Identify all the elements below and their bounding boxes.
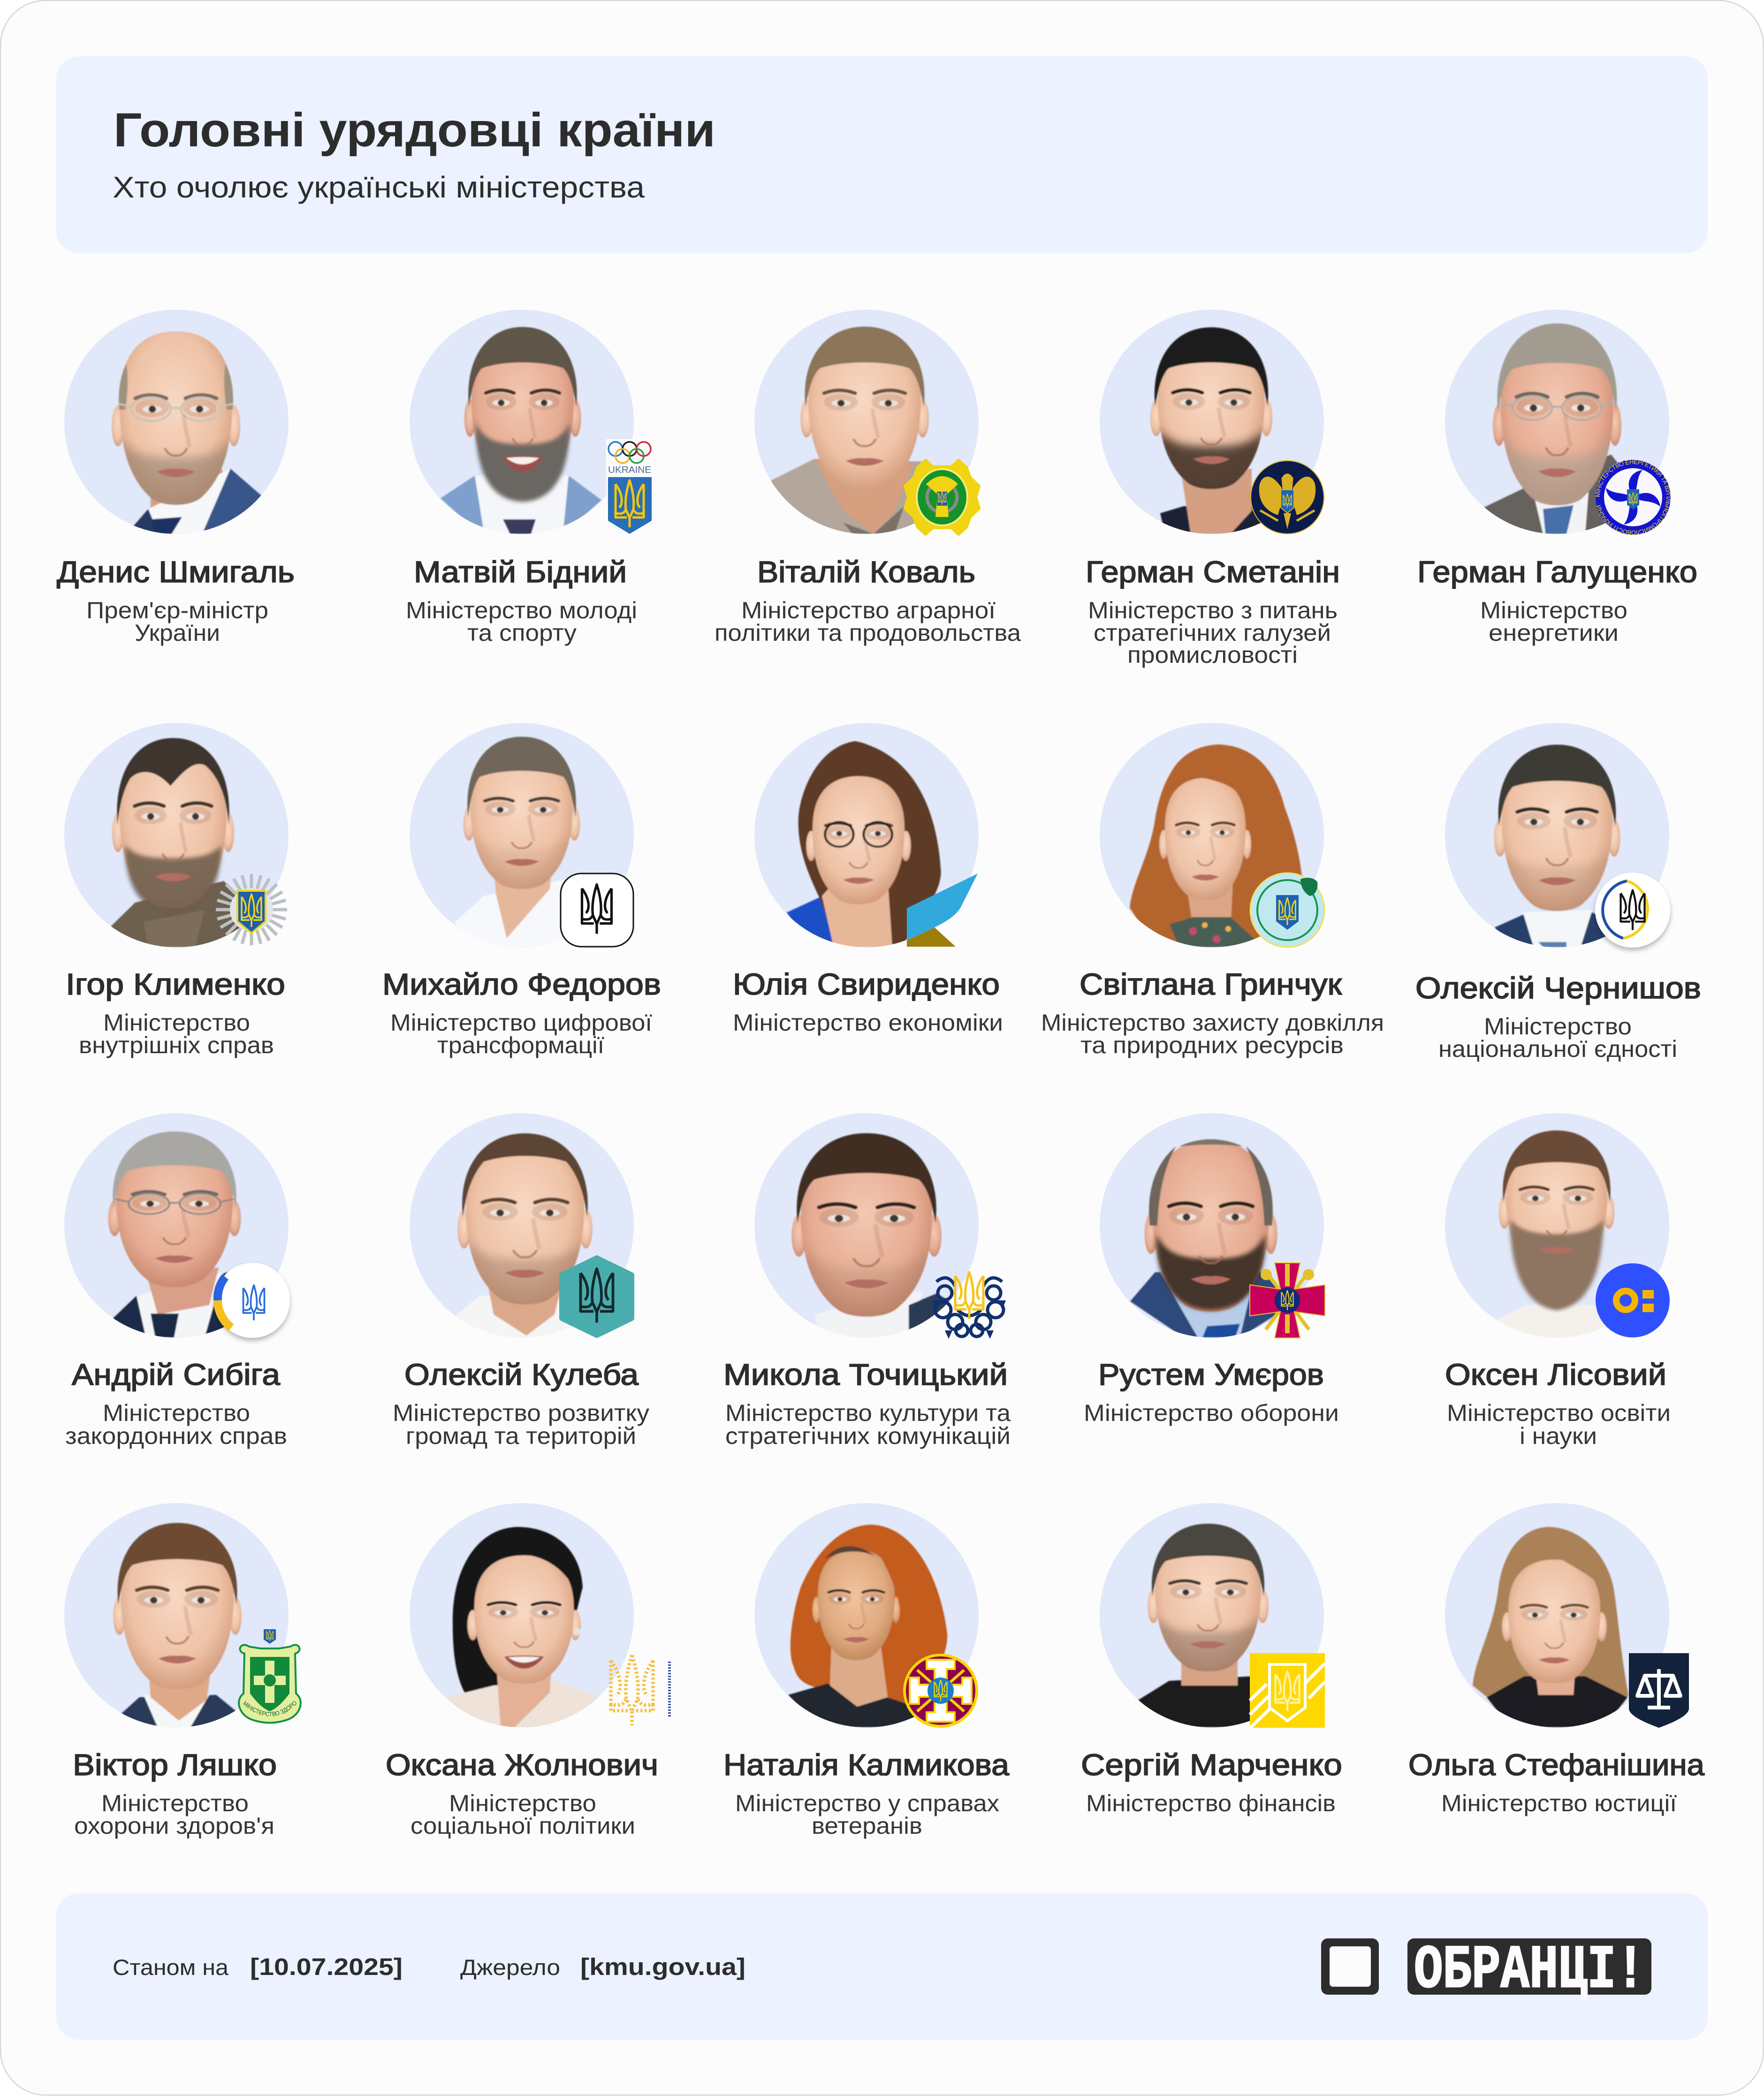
person: Герман Галущенко	[1417, 310, 1697, 646]
role	[411, 1790, 635, 1839]
role: Міністерство	[449, 1790, 596, 1816]
role: Міністерство оборони	[1084, 1400, 1339, 1426]
badge: economy ministry shape	[907, 873, 978, 947]
portrait	[754, 310, 979, 534]
person: Світлана Гринчук	[1041, 723, 1384, 1058]
role	[1438, 1013, 1677, 1062]
name: Рустем Умєров	[1098, 1358, 1324, 1391]
role	[715, 597, 1021, 646]
role: ветеранів	[812, 1813, 922, 1839]
name: Андрій Сибіга	[72, 1358, 280, 1391]
portrait	[410, 1113, 634, 1337]
name: Наталія Калмикова	[723, 1748, 1009, 1782]
badge: national unity ministry	[1595, 873, 1670, 948]
role: Міністерство юстиції	[1441, 1790, 1677, 1816]
role	[725, 1400, 1011, 1449]
badge: digital ministry trident	[561, 873, 633, 947]
portrait	[410, 723, 634, 947]
name: Оксен Лісовий	[1445, 1358, 1666, 1391]
role	[65, 1400, 287, 1449]
badge: environment ministry	[1250, 873, 1324, 947]
role	[390, 1010, 652, 1058]
badge: Olympic committee	[606, 439, 652, 534]
role: Міністерство у справах	[735, 1790, 999, 1816]
person: Матвій Бідний	[406, 310, 652, 646]
header panel	[56, 56, 1708, 253]
person: Віталій Коваль	[715, 310, 1021, 646]
portrait	[64, 310, 289, 534]
role: Міністерство аграрної	[741, 597, 996, 623]
role: політики та продовольства	[715, 620, 1021, 646]
portrait	[410, 310, 634, 534]
name: Ігор Клименко	[66, 967, 285, 1001]
role	[735, 1790, 999, 1839]
role: Міністерство	[103, 1010, 250, 1036]
person: Андрій Сибіга	[64, 1113, 290, 1449]
person: Сергій Марченко	[1081, 1503, 1342, 1816]
portrait	[1445, 1113, 1669, 1337]
role: та природних ресурсів	[1080, 1032, 1344, 1058]
person: Герман Сметанін	[1086, 310, 1340, 668]
badge: agrarian ministry gear	[905, 460, 979, 534]
date label: Станом на	[113, 1955, 229, 1980]
role: Міністерство з питань	[1088, 597, 1338, 623]
role: трансформації	[437, 1032, 604, 1058]
name: Ольга Стефанішина	[1408, 1748, 1704, 1782]
name: Світлана Гринчук	[1080, 967, 1342, 1001]
role: Міністерство фінансів	[1086, 1790, 1336, 1816]
role: стратегічних галузей	[1094, 620, 1331, 646]
person: Олексій Чернишов	[1415, 723, 1701, 1062]
role: соціальної політики	[411, 1813, 635, 1839]
role: закордонних справ	[65, 1423, 287, 1449]
badge: veterans ministry	[905, 1655, 977, 1726]
role: енергетики	[1489, 620, 1619, 646]
role	[1041, 1010, 1384, 1058]
person: Рустем Умєров	[1084, 1113, 1339, 1426]
source value: [kmu.gov.ua]	[580, 1953, 745, 1980]
role: і науки	[1520, 1423, 1597, 1449]
role: Міністерство	[1484, 1013, 1632, 1040]
person: Ольга Стефанішина	[1408, 1503, 1704, 1816]
role: Міністерство культури та	[725, 1400, 1011, 1426]
name: Віктор Ляшко	[73, 1748, 277, 1782]
name: Юлія Свириденко	[733, 967, 1000, 1001]
badge: health ministry shield: МІНІСТЕРСТВО ЗДОРОВ'Я	[242, 1674, 298, 1718]
role: Міністерство	[1480, 597, 1627, 623]
role	[1447, 1400, 1671, 1449]
role: внутрішніх справ	[79, 1032, 274, 1058]
badge: Olympic committee: UKRAINE	[608, 465, 651, 475]
role	[79, 1010, 274, 1058]
person: Ігор Клименко	[64, 723, 289, 1058]
portrait	[754, 723, 979, 947]
role: Міністерство економіки	[733, 1010, 1003, 1036]
role	[1088, 597, 1338, 668]
portrait	[754, 1113, 979, 1337]
role: охорони здоров'я	[74, 1813, 274, 1839]
badge: justice ministry shield	[1629, 1653, 1689, 1728]
badge: education ministry	[1596, 1263, 1670, 1337]
role: Міністерство	[103, 1400, 250, 1426]
name: Олексій Чернишов	[1415, 971, 1701, 1005]
person: Юлія Свириденко	[733, 723, 1003, 1036]
person: Олексій Кулеба	[393, 1113, 649, 1449]
role: громад та територій	[406, 1423, 636, 1449]
date value: [10.07.2025]	[250, 1953, 403, 1980]
role	[86, 597, 268, 646]
person: Оксен Лісовий	[1445, 1113, 1671, 1449]
role: Міністерство цифрової	[390, 1010, 652, 1036]
badge: defence ministry cross	[1250, 1263, 1325, 1338]
name: Матвій Бідний	[414, 555, 627, 589]
role	[1480, 597, 1627, 646]
badge: finance ministry	[1250, 1653, 1325, 1728]
portrait	[1100, 723, 1324, 947]
source label: Джерело	[460, 1955, 560, 1980]
badge: social policy dotted trident	[611, 1655, 669, 1725]
role: Міністерство розвитку	[393, 1400, 649, 1426]
person: Віктор Ляшко	[64, 1503, 301, 1839]
badge: energy ministry: МІНІСТЕРСТВО ЕНЕРГЕТИКИ ТА ВУГІЛЬНОЇ ПРОМИСЛОВОСТІ УКРАЇНИ	[1594, 458, 1672, 536]
name: Михайло Федоров	[382, 967, 661, 1001]
person: Микола Точицький	[723, 1113, 1011, 1449]
portrait	[1445, 1503, 1669, 1727]
name: Сергій Марченко	[1081, 1748, 1342, 1782]
person: Наталія Калмикова	[723, 1503, 1009, 1839]
name: Герман Сметанін	[1086, 555, 1340, 589]
subtitle: Хто очолює українські міністерства	[113, 170, 645, 204]
role	[74, 1790, 274, 1839]
portrait	[64, 1113, 289, 1337]
person: Михайло Федоров	[382, 723, 661, 1058]
role: Міністерство молоді	[406, 597, 637, 623]
role	[393, 1400, 649, 1449]
portrait	[410, 1503, 634, 1727]
portrait	[1100, 1113, 1324, 1337]
portrait	[1445, 723, 1669, 947]
role	[406, 597, 637, 646]
badge: communities ministry hexagon	[562, 1258, 631, 1335]
role: Міністерство освіти	[1447, 1400, 1671, 1426]
logo wordmark: ОБРАНЦІ!	[1414, 1937, 1645, 2005]
name: Микола Точицький	[723, 1358, 1008, 1391]
person: Денис Шмигаль	[57, 310, 295, 646]
badge: foreign ministry	[215, 1263, 290, 1338]
footer panel	[56, 1893, 1708, 2040]
role: Міністерство захисту довкілля	[1041, 1010, 1384, 1036]
badge: strategic industries eagle	[1251, 461, 1324, 534]
person: Оксана Жолнович	[386, 1503, 669, 1839]
portrait	[754, 1503, 979, 1727]
badge: culture ministry ornament	[933, 1272, 1006, 1339]
portrait	[1100, 1503, 1324, 1727]
role: України	[135, 620, 220, 646]
badge: health ministry shield	[239, 1629, 301, 1723]
title: Головні урядовці країни	[114, 103, 715, 157]
portrait	[64, 723, 289, 947]
badge: police star	[216, 874, 287, 945]
portrait	[64, 1503, 289, 1727]
role: національної єдності	[1438, 1036, 1677, 1062]
name: Денис Шмигаль	[57, 555, 295, 589]
role: та спорту	[467, 620, 577, 646]
role: Прем'єр-міністр	[86, 597, 268, 623]
name: Герман Галущенко	[1417, 555, 1697, 589]
logo square	[1321, 1938, 1379, 1995]
role: Міністерство	[101, 1790, 249, 1816]
portrait	[1100, 310, 1324, 534]
role: промисловості	[1127, 642, 1298, 668]
name: Олексій Кулеба	[404, 1358, 639, 1391]
role: стратегічних комунікацій	[725, 1423, 1011, 1449]
name: Віталій Коваль	[757, 555, 975, 589]
name: Оксана Жолнович	[386, 1748, 658, 1782]
portrait	[1445, 310, 1669, 534]
